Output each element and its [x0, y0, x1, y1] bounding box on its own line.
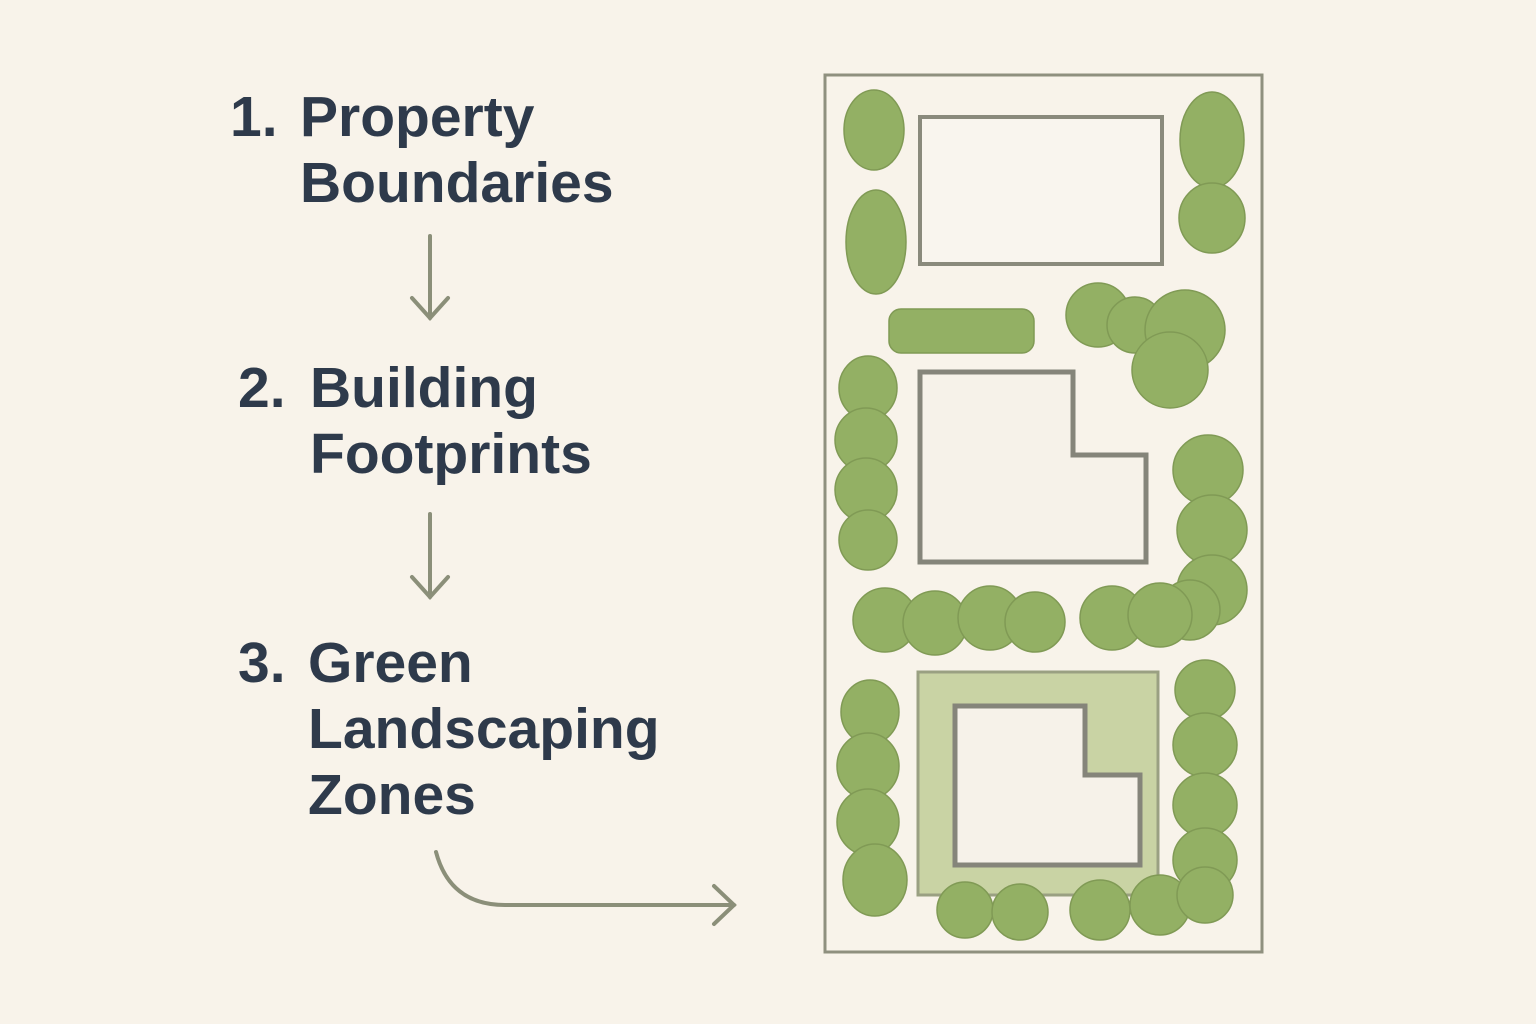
arrow 2 [412, 514, 448, 597]
step 1 text: Property [300, 85, 534, 149]
step 1 text: Boundaries [300, 151, 614, 215]
step 3 text: Zones [308, 763, 476, 827]
step 3 text: Landscaping [308, 697, 660, 761]
step 2 text [238, 356, 592, 486]
trees [835, 90, 1247, 940]
step 3 text [238, 631, 660, 827]
site plan [825, 75, 1262, 952]
building footprint [920, 372, 1146, 562]
step 1 text [230, 85, 614, 215]
step 2 text: Footprints [310, 422, 592, 486]
step 2 text: Building [310, 356, 538, 420]
arrow 1 [412, 236, 448, 318]
landscaping zone [918, 672, 1158, 895]
curved arrow to plan [436, 852, 734, 924]
step 2 text: 2. [238, 356, 286, 420]
step 3 text: 3. [238, 631, 286, 695]
step 3 text: Green [308, 631, 473, 695]
property boundary rect [920, 117, 1162, 264]
step 1 text: 1. [230, 85, 278, 149]
